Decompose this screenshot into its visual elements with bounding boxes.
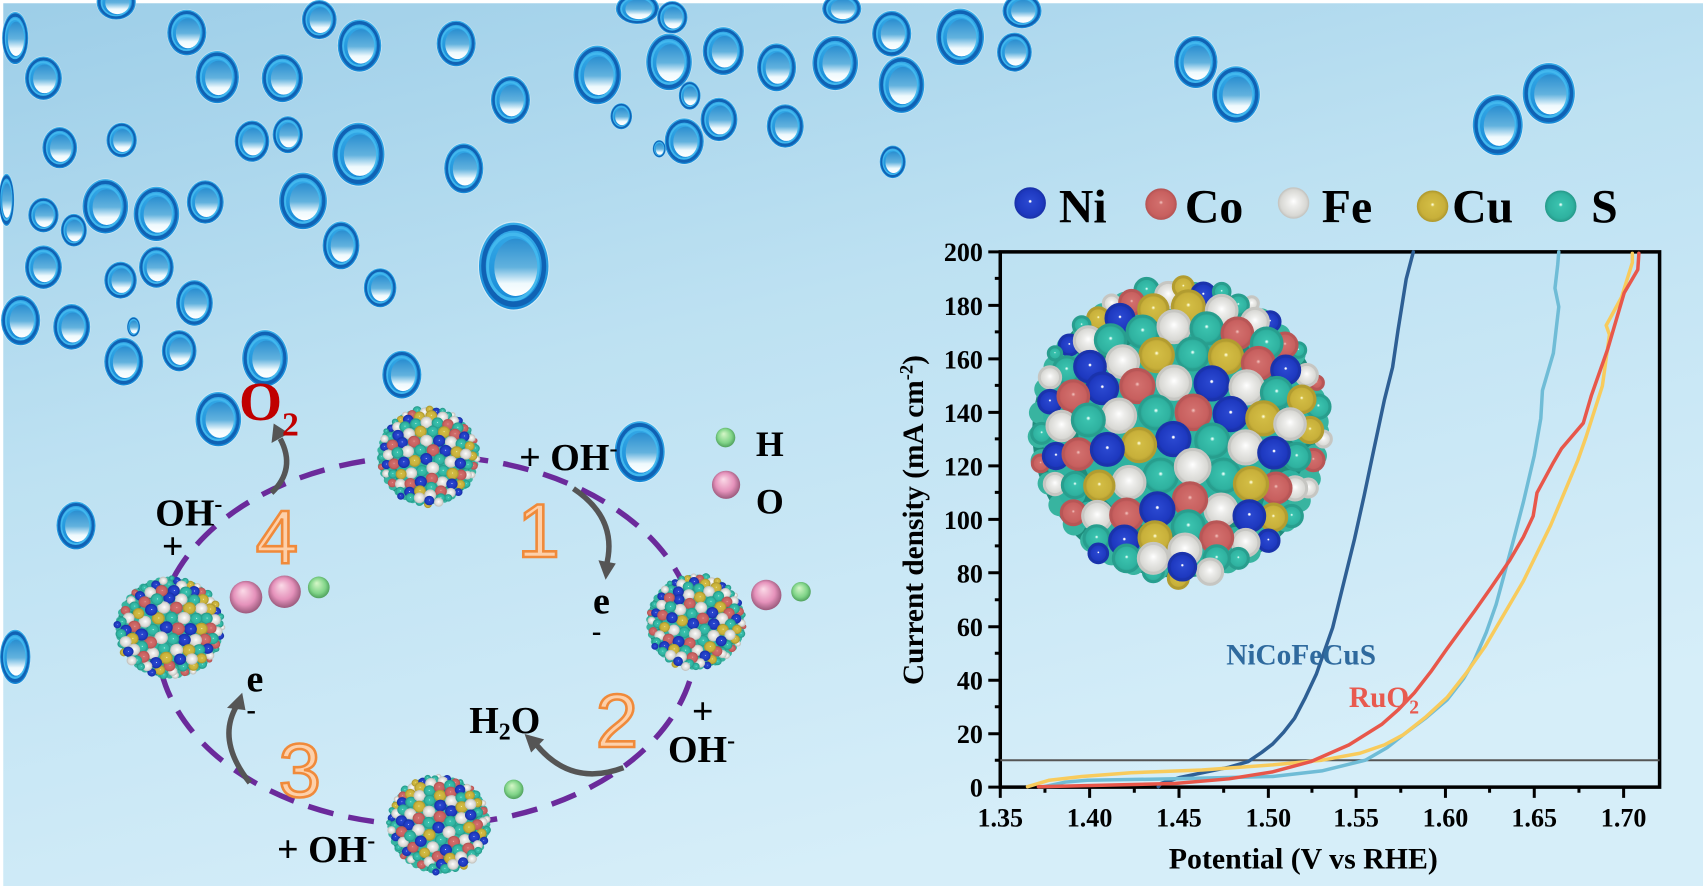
x axis tick labels: 1.35 (977, 803, 1023, 832)
x axis title: Potential (V vs RHE) (1169, 843, 1438, 876)
label: OH- + step 4 (155, 491, 222, 568)
element legend: Fe (1322, 181, 1372, 234)
x axis tick labels: 1.55 (1333, 803, 1379, 832)
element legend: Co (1185, 181, 1243, 234)
element legend: Ni (1059, 181, 1107, 234)
element legend: Cu (1452, 181, 1513, 234)
element legend: S (1591, 181, 1618, 234)
legend: O atom: O (756, 482, 784, 522)
label: O2 product: O (239, 371, 282, 432)
label: H2O product: 2 (499, 719, 511, 745)
label: OH- + step 4: OH (155, 493, 214, 535)
curve label: NiCoFeCuS: NiCoFeCuS (1226, 640, 1376, 671)
label: + OH- step 3: + OH (277, 829, 367, 871)
adsorbed H: bottom particle (504, 780, 523, 799)
label: + OH- step 2: + (692, 691, 714, 733)
y axis title: -2 (896, 365, 916, 380)
curve: NiCoFeCuS (1158, 252, 1413, 787)
step number 2: 2 (596, 679, 638, 764)
y axis title: ) (898, 355, 930, 365)
label: + OH- step 2 (668, 691, 735, 771)
water droplets (0, 0, 1576, 685)
y axis tick labels: 100 (944, 506, 983, 535)
y axis tick labels: 40 (957, 666, 983, 695)
label: + OH- step 1: - (609, 436, 617, 462)
x axis tick labels: 1.40 (1067, 803, 1112, 832)
element legend (1015, 181, 1618, 234)
10 mA reference line (1000, 759, 1660, 761)
nanoparticle: left (95, 558, 245, 699)
x axis tick labels: 1.50 (1246, 803, 1291, 832)
nanoparticle: top (378, 406, 480, 508)
step number 3: 3 (279, 729, 321, 814)
curves (1000, 252, 1660, 787)
large nanoparticle inset (1032, 277, 1331, 588)
y axis tick labels: 180 (944, 292, 983, 321)
label: + OH- step 3: - (367, 828, 375, 854)
label: electron step 3: - (247, 695, 256, 726)
label: electron step 1: - (592, 617, 601, 648)
y axis tick labels: 140 (944, 399, 983, 428)
nanoparticle: bottom (369, 756, 511, 886)
y axis tick labels: 0 (970, 774, 983, 803)
legend: O atom (712, 471, 784, 522)
catalytic cycle dashed ring (157, 456, 696, 825)
step number 4: 4 (256, 496, 298, 581)
label: OH- + step 4: + (162, 526, 183, 568)
label: OH- + step 4: - (214, 491, 222, 517)
y axis tick labels: 60 (957, 613, 983, 642)
y axis tick labels: 160 (944, 345, 983, 374)
label: H2O product: H (469, 700, 499, 742)
label: electron step 3: e (247, 659, 263, 701)
curve label: RuO2: RuO (1349, 682, 1409, 714)
step number 1: 1 (518, 489, 560, 574)
y axis tick labels: 120 (944, 452, 983, 481)
x axis tick labels: 1.60 (1423, 803, 1468, 832)
y axis tick labels: 80 (957, 559, 983, 588)
x axis tick labels: 1.65 (1511, 803, 1557, 832)
legend: H atom: H (756, 424, 784, 464)
LSV polarization chart (896, 238, 1660, 876)
adsorbed OH: right particle (751, 580, 811, 610)
legend: H atom (716, 424, 784, 464)
nanoparticle: right (630, 558, 763, 687)
x axis tick labels: 1.45 (1156, 803, 1202, 832)
label: O2 product: 2 (282, 406, 299, 443)
curve: yellow sample (1028, 253, 1632, 787)
label: electron step 3 (247, 659, 263, 726)
arrow: step 3 electron release (227, 693, 250, 783)
label: electron step 1: e (593, 580, 610, 622)
curve: RuO2 (1038, 253, 1639, 787)
x axis tick labels: 1.70 (1601, 803, 1646, 832)
y axis tick labels: 200 (944, 238, 983, 267)
arrow: step 4 oxygen release (272, 423, 289, 493)
label: electron step 1 (592, 580, 610, 648)
curve label: RuO2: 2 (1409, 697, 1419, 718)
label: + OH- step 2: OH (668, 729, 727, 771)
curve: light blue sample (1044, 252, 1559, 787)
chart frame and ticks (988, 252, 1660, 798)
label: + OH- step 1: + OH (519, 437, 609, 479)
y axis tick labels: 20 (957, 720, 983, 749)
adsorbed OOH: left particle (230, 575, 330, 613)
y axis tick labels (944, 238, 983, 803)
x axis tick labels (977, 803, 1646, 832)
y axis title: Current density (mA cm (898, 380, 930, 685)
label: + OH- step 2: - (727, 728, 735, 754)
arrow: step 1 electron release (573, 489, 616, 580)
label: H2O product: O (511, 700, 540, 742)
arrow: step 2 water release (525, 734, 623, 774)
